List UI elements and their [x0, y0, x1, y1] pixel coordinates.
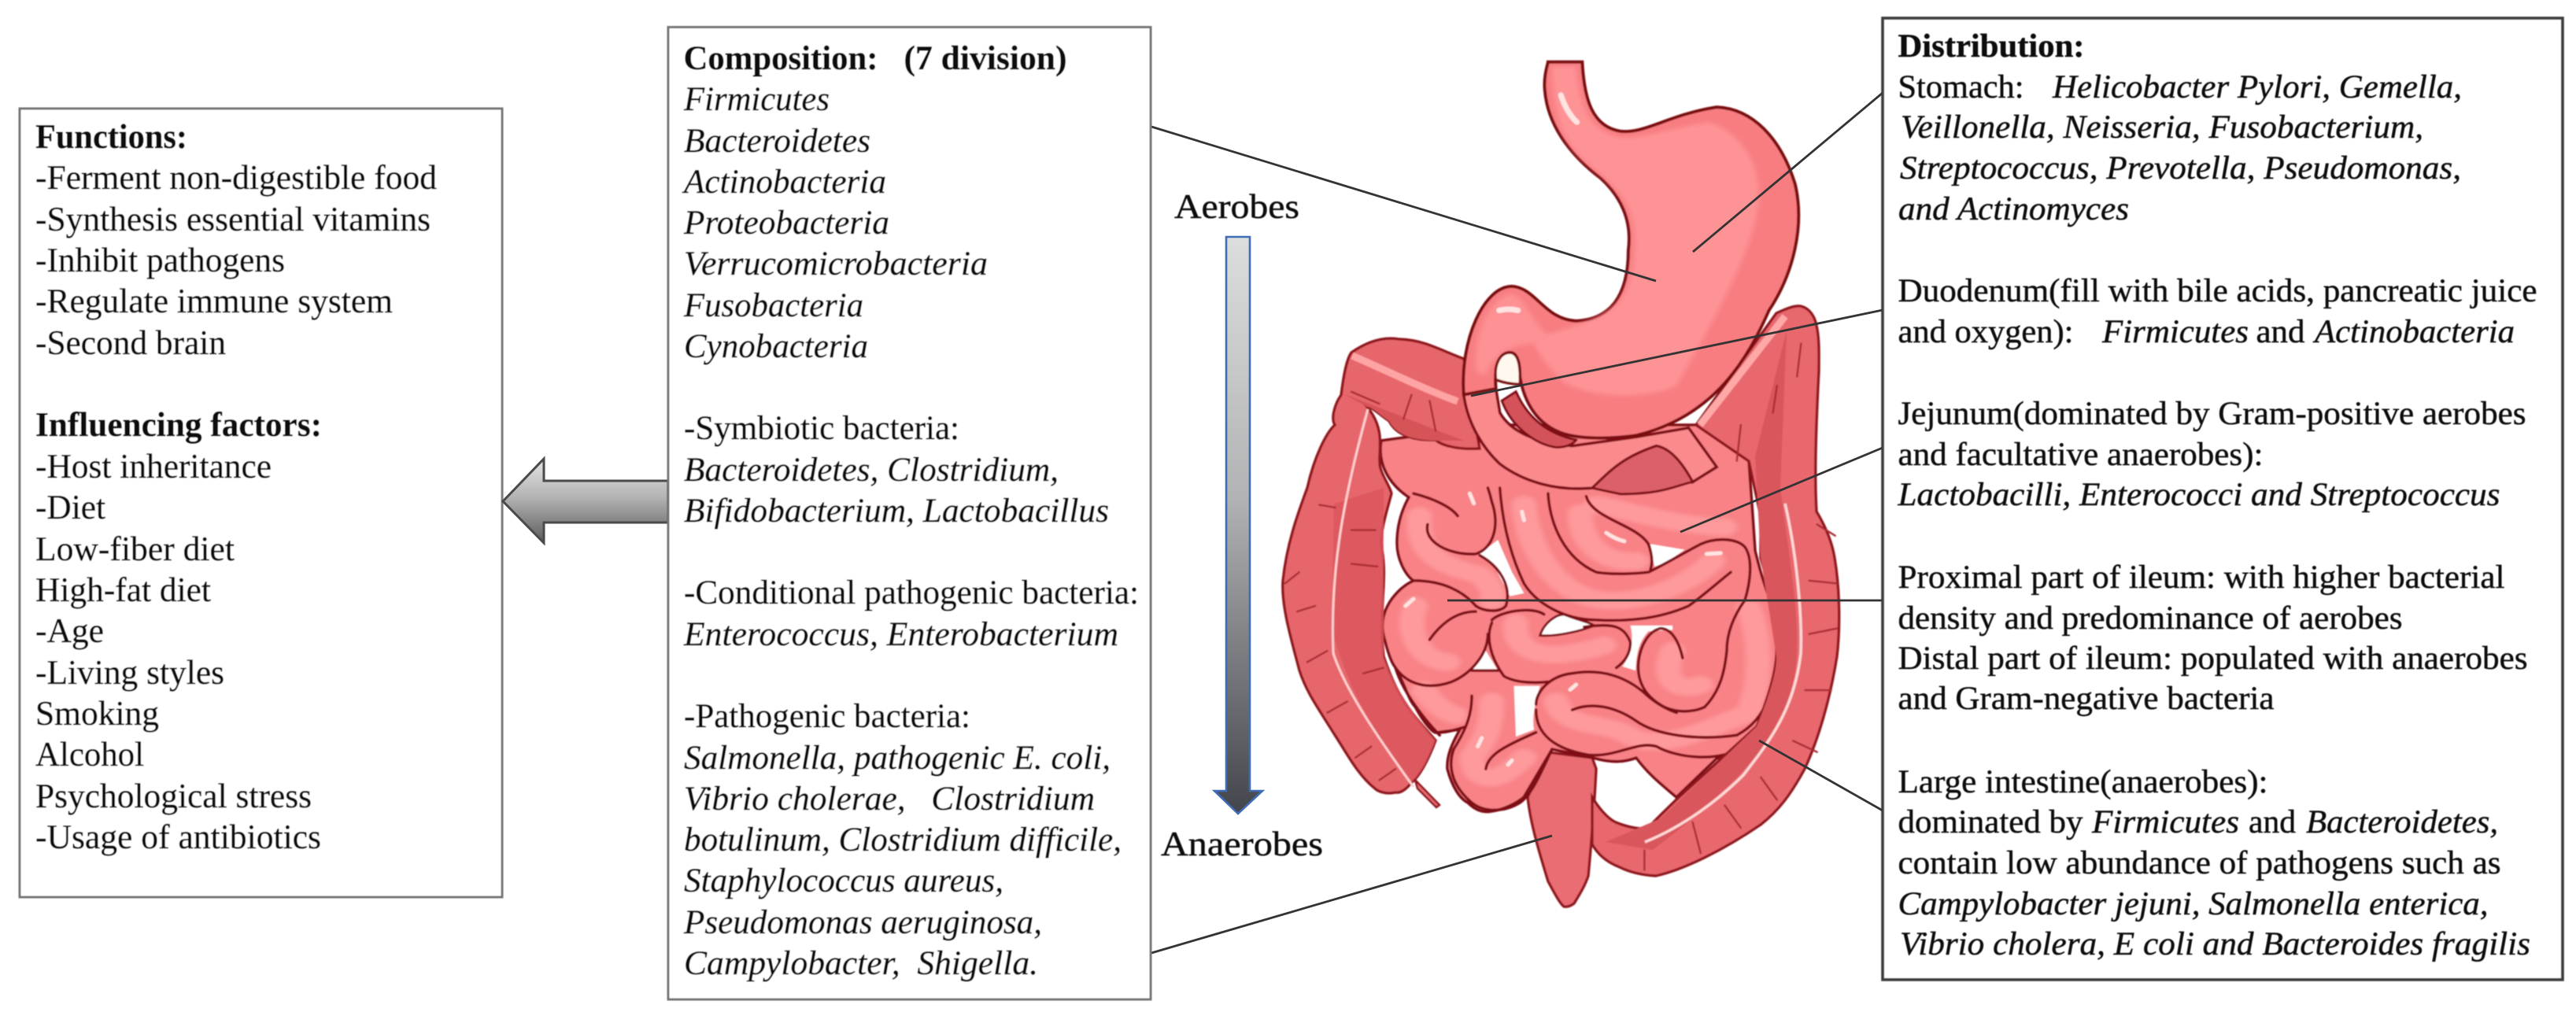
label: aerobes: Aerobes [1174, 187, 1299, 226]
panel: composition [668, 27, 1151, 999]
text block: function list: -Second brain [35, 323, 226, 362]
text block: factor list: Alcohol [35, 735, 144, 774]
text block: seven divisions [682, 80, 988, 365]
text block: factor list: High-fat diet [35, 571, 211, 609]
text block: pathogenic bacteria: botulinum, Clostridium difficile, [684, 821, 1122, 859]
text block: pathogenic bacteria: Staphylococcus aureus, [684, 862, 1003, 899]
text block: conditional pathogenic bacteria [683, 574, 1139, 653]
text block: large intestine: dominated by [1898, 804, 2083, 840]
stomach and esophagus [1351, 62, 1801, 461]
heading: composition: (7 division) [904, 39, 1067, 77]
text block: large intestine: Vibrio cholera, E coli and Bacteroides fragilis [1900, 926, 2530, 962]
text block: factor list: -Diet [35, 488, 105, 526]
label: anaerobes: Anaerobes [1161, 825, 1323, 863]
text block: conditional pathogenic bacteria: Enterococcus, Enterobacterium [683, 615, 1118, 653]
heading: composition [683, 39, 1067, 77]
text block: symbiotic bacteria: -Symbiotic bacteria: [684, 409, 959, 447]
heading: functions: Functions: [35, 117, 187, 156]
text block: large intestine: Firmicutes [2091, 804, 2239, 840]
text block: factor list: Low-fiber diet [35, 530, 235, 568]
text block: factor list: -Age [35, 611, 104, 650]
text block: symbiotic bacteria: Bifidobacterium, Lactobacillus [684, 492, 1109, 530]
text block: seven divisions: Actinobacteria [682, 163, 886, 201]
text block: function list: -Regulate immune system [35, 282, 393, 320]
duodenum and jejunal flexure [1464, 389, 1717, 494]
text block: function list: -Synthesis essential vitamins [35, 200, 431, 238]
text block: symbiotic bacteria: Bacteroidetes, Clostridium, [684, 451, 1059, 489]
text block: function list: -Inhibit pathogens [35, 241, 285, 279]
text block: large intestine: Campylobacter jejuni, Salmonella enterica, [1898, 886, 2489, 922]
text block: pathogenic bacteria: -Pathogenic bacteria: [684, 697, 970, 735]
text block: ileum: Distal part of ileum: populated with anaerobes [1898, 641, 2528, 677]
arrow: aerobes to anaerobes gradient [1214, 237, 1262, 814]
text block: large intestine: Large intestine(anaerobes): [1898, 764, 2268, 800]
connector: stomach to distribution box [1693, 93, 1883, 252]
text block: stomach: Veillonella, Neisseria, Fusobacterium, [1901, 109, 2423, 146]
text block: pathogenic bacteria [683, 697, 1122, 982]
text block: ileum: density and predominance of aerobes [1898, 600, 2402, 637]
illustration: digestive tract [1283, 62, 1839, 907]
connector: ileum to distribution box [1447, 600, 1883, 601]
text block: function list [35, 158, 437, 362]
heading: composition: Composition: [683, 39, 878, 77]
small intestine [1380, 425, 1776, 812]
colon haustra folds [1285, 504, 1837, 870]
text block: conditional pathogenic bacteria: -Conditional pathogenic bacteria: [684, 574, 1139, 611]
text block: duodenum: Actinobacteria [2312, 314, 2515, 350]
text block: pathogenic bacteria: Vibrio cholerae, Clostridium [684, 780, 1095, 818]
text block: jejunum: Lactobacilli, Enterococci and Streptococcus [1897, 477, 2500, 513]
text block: pathogenic bacteria: Salmonella, pathogenic E. coli, [684, 739, 1111, 777]
text block: large intestine: contain low abundance of pathogens such as [1898, 845, 2501, 881]
text block: seven divisions: Verrucomicrobacteria [684, 245, 988, 283]
text block: duodenum: and oxygen): [1898, 314, 2073, 350]
text block: large intestine [1898, 764, 2530, 962]
large intestine: descending and sigmoid colon [1592, 306, 1839, 876]
text block: stomach: Streptococcus, Prevotella, Pseudomonas, [1900, 150, 2461, 187]
text block: jejunum [1897, 396, 2526, 513]
text block: seven divisions: Bacteroidetes [684, 122, 870, 160]
text block: stomach: Helicobacter Pylori, Gemella, [2052, 69, 2462, 105]
text block: large intestine: and [2249, 804, 2296, 840]
text block: duodenum: Firmicutes [2101, 314, 2249, 350]
text block: seven divisions: Fusobacteria [683, 286, 863, 324]
text block: factor list: Psychological stress [35, 777, 312, 815]
text block: function list: -Ferment non-digestible food [35, 158, 437, 197]
connector: composition box to rectum [1151, 836, 1552, 953]
heading: influencing factors: Influencing factors: [35, 405, 322, 444]
text block: factor list: -Usage of antibiotics [35, 818, 321, 856]
large intestine: ascending and transverse colon [1283, 338, 1480, 807]
mesentery [1592, 446, 1693, 494]
text block: duodenum [1898, 273, 2537, 350]
text block: factor list [35, 447, 321, 856]
text block: ileum [1898, 560, 2528, 717]
connector: duodenum to distribution box [1471, 310, 1883, 396]
text block: duodenum: and [2256, 314, 2304, 350]
text block: stomach: and Actinomyces [1898, 191, 2129, 227]
panel: distribution [1883, 18, 2563, 980]
text block: duodenum: Duodenum(fill with bile acids, pancreatic juice [1898, 273, 2537, 309]
text block: large intestine: Bacteroidetes, [2306, 804, 2498, 840]
text block: factor list: Smoking [35, 694, 159, 733]
text block: pathogenic bacteria: Pseudomonas aeruginosa, [683, 903, 1042, 941]
text block: ileum: Proximal part of ileum: with higher bacterial [1898, 560, 2504, 596]
text block: stomach [1898, 69, 2462, 227]
text block: factor list: -Host inheritance [35, 447, 272, 486]
rectum [1528, 752, 1596, 907]
small intestine loops (lower) [1395, 488, 1771, 810]
text block: pathogenic bacteria: Campylobacter, Shigella. [684, 944, 1038, 982]
arrow: composition to functions [503, 459, 668, 543]
connector: composition box to stomach [1151, 127, 1656, 281]
text block: ileum: and Gram-negative bacteria [1898, 681, 2275, 717]
heading: distribution: Distribution: [1898, 28, 2084, 65]
text block: stomach: Stomach: [1898, 69, 2024, 105]
text block: seven divisions: Firmicutes [683, 80, 830, 118]
text block: factor list: -Living styles [35, 653, 224, 692]
text block: seven divisions: Proteobacteria [683, 204, 889, 242]
connector: jejunum to distribution box [1680, 448, 1883, 532]
text block: seven divisions: Cynobacteria [684, 327, 868, 365]
text block: symbiotic bacteria [684, 409, 1109, 530]
text block: jejunum: and facultative anaerobes): [1898, 437, 2264, 473]
text block: jejunum: Jejunum(dominated by Gram-positive aerobes [1898, 396, 2526, 432]
connector: large intestine to distribution box [1759, 740, 1883, 811]
panel: functions and influencing factors [20, 109, 502, 897]
